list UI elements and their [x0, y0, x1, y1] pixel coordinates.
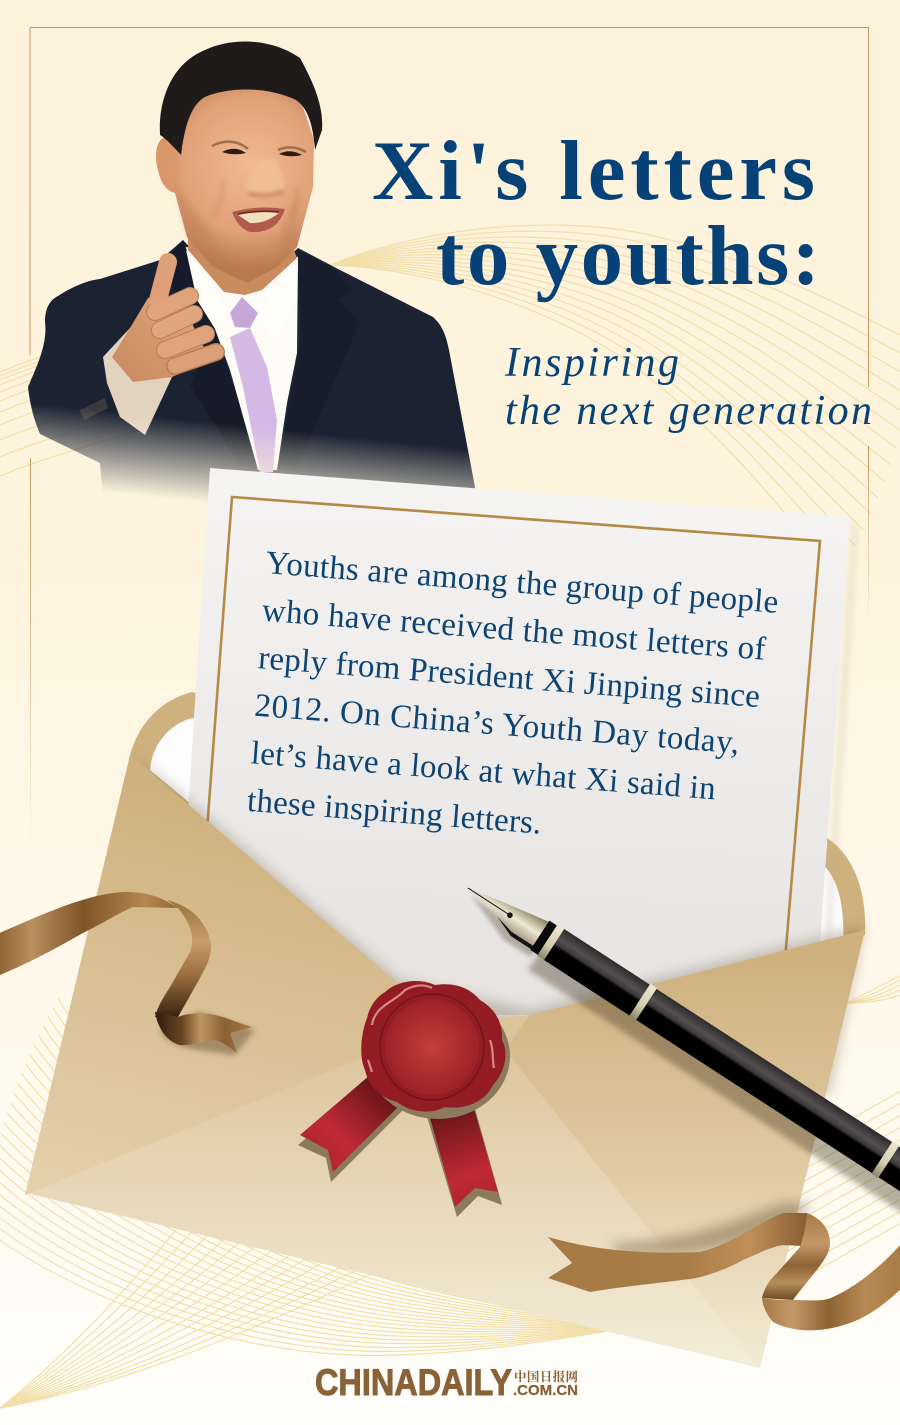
letter body text: Youths are among the group of people	[264, 545, 780, 621]
nib	[459, 875, 551, 949]
barrel	[544, 929, 900, 1221]
gold ribbon bottom right	[548, 1203, 900, 1330]
left flap	[25, 755, 430, 1195]
wax body	[361, 981, 505, 1112]
title: Xi's letters	[372, 124, 815, 218]
envelope back	[130, 692, 865, 1100]
nose	[245, 158, 285, 196]
mouth	[232, 208, 285, 232]
right flap	[505, 930, 865, 1368]
shirt	[185, 247, 298, 470]
eyes and brows	[212, 142, 306, 156]
collar ring	[530, 921, 557, 955]
left lapel	[165, 240, 258, 470]
ear	[156, 136, 176, 193]
ribbon shadow	[610, 1203, 810, 1256]
pen shadow	[528, 948, 900, 1231]
suit	[28, 240, 475, 500]
letter body text: reply from President Xi Jinping since	[257, 640, 761, 715]
letter shadow	[820, 520, 858, 1000]
China Daily logo: .COM.CN	[513, 1382, 578, 1399]
long band	[548, 1213, 818, 1292]
subtitle: the next generation	[505, 388, 872, 434]
page border	[30, 28, 869, 858]
subtitle: Inspiring	[504, 340, 679, 386]
cuff	[103, 328, 172, 435]
title: to youths:	[436, 209, 820, 303]
letter body text: who have received the most letters of	[261, 593, 767, 668]
tail shadow	[160, 1012, 255, 1055]
long band	[0, 892, 178, 977]
letter body text: 2012. On China’s Youth Day today,	[253, 688, 741, 761]
gold ribbon left	[0, 892, 255, 1055]
letter gold border	[207, 497, 820, 960]
end ring	[871, 1141, 899, 1178]
wax rim	[380, 994, 484, 1100]
envelope front	[25, 750, 865, 1368]
China Daily logo: CHINADAILY	[315, 1362, 512, 1403]
China Daily logo: 中国日报网	[514, 1369, 578, 1384]
neck	[188, 232, 297, 295]
sleeve button	[80, 398, 108, 420]
falling band	[155, 900, 211, 1017]
hair	[160, 41, 322, 155]
wax highlights	[368, 985, 494, 1072]
letter sheet	[175, 468, 858, 1015]
wax seal with ribbons	[298, 981, 510, 1217]
red ribbons	[300, 1075, 405, 1172]
title	[372, 124, 820, 303]
letter body text: let’s have a look at what Xi said in	[250, 735, 717, 807]
ribbon shadows	[298, 1085, 502, 1217]
mid ring	[629, 984, 657, 1021]
portrait of Xi Jinping	[28, 41, 475, 540]
lapels	[277, 250, 350, 470]
subtitle	[504, 340, 872, 434]
hand	[112, 262, 216, 382]
tie	[230, 297, 277, 472]
tail	[155, 1012, 252, 1053]
fountain pen	[448, 872, 900, 1236]
lower band	[762, 1240, 900, 1330]
face shading	[175, 184, 300, 250]
face	[172, 85, 314, 283]
bottom panel	[26, 1015, 760, 1368]
flap shadow	[130, 750, 865, 1095]
letter body text: these inspiring letters.	[246, 783, 543, 842]
loop	[762, 1213, 830, 1300]
wax centre	[385, 999, 479, 1095]
collar	[186, 250, 298, 330]
letter body text	[246, 545, 780, 859]
seal shadow	[366, 993, 510, 1119]
